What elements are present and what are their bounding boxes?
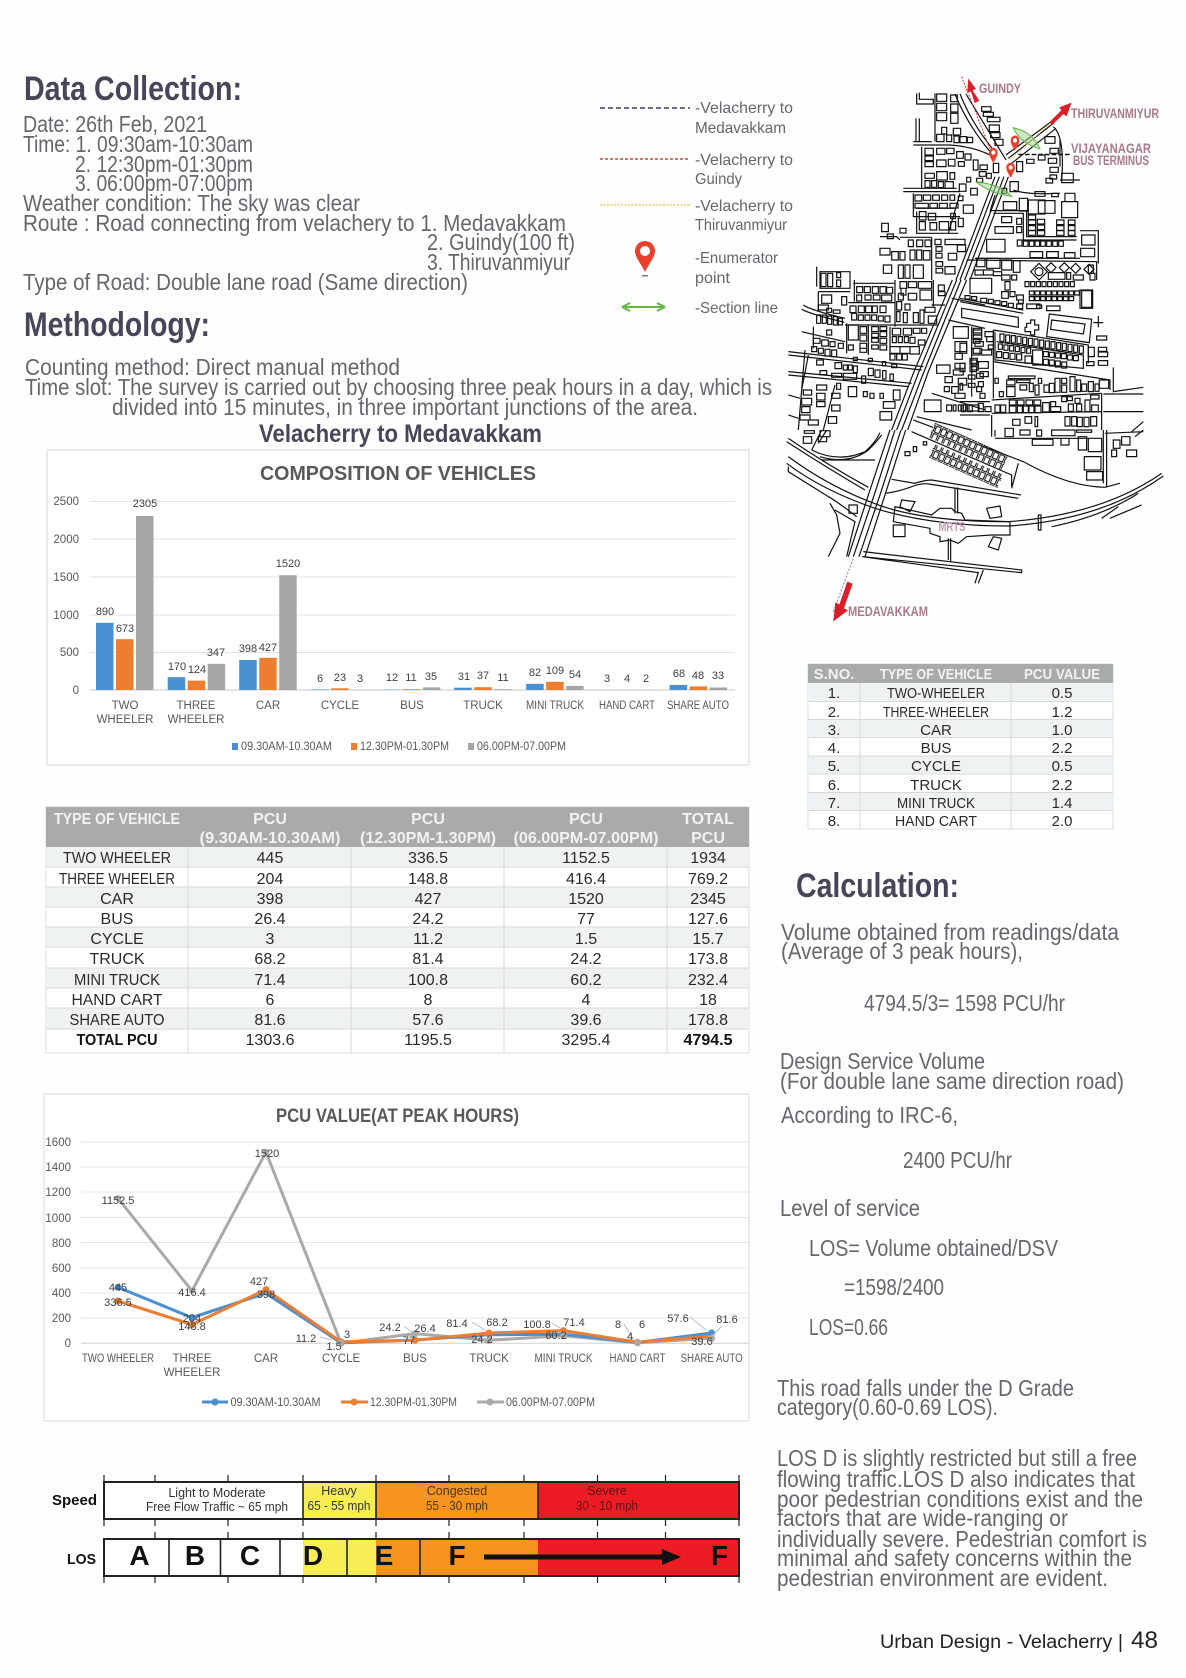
bar chart: composition of vehicles: MINI TRUCK (526, 700, 584, 712)
text block: data collection details: Time: 1. 09:30am-10:30am (23, 131, 253, 157)
map of velacherry: GUINDY (979, 80, 1022, 96)
line chart: pcu value at peak hours: CYCLE (322, 1353, 360, 1365)
line chart: pcu value at peak hours: 24.2 (379, 1322, 401, 1334)
table: pcu by time slot: 1195.5 (404, 1032, 452, 1049)
table: pcu by time slot: 1152.5 (562, 850, 610, 867)
text block: los d description: flowing traffic.LOS D also indicates that (777, 1466, 1136, 1492)
legend: velacherry to guindy: Guindy (695, 171, 742, 188)
table: pcu values per vehicle type: 6. (828, 777, 840, 794)
bar chart: composition of vehicles: 82 (529, 667, 541, 679)
line chart: pcu value at peak hours: THREE (173, 1353, 212, 1365)
bar chart: composition of vehicles: SHARE AUTO (667, 700, 729, 712)
chart legend: 06.00PM-07.00PM (506, 1397, 595, 1409)
table: pcu values per vehicle type: HAND CART (895, 813, 977, 830)
map of velacherry: MEDAVAKKAM (848, 603, 928, 619)
text block: methodology details: divided into 15 minutes, in three important junctions of the area. (112, 394, 698, 420)
bar chart: composition of vehicles: 35 (425, 671, 437, 683)
bar chart: composition of vehicles: 1500 (53, 572, 79, 584)
table: pcu by time slot: PCU (411, 811, 445, 828)
table: pcu by time slot: (12.30PM-1.30PM) (360, 830, 496, 847)
map of velacherry: BUS TERMINUS (1073, 152, 1149, 168)
speed row: Congested (427, 1484, 487, 1498)
table: pcu by time slot: 3 (266, 931, 275, 948)
bar chart: composition of vehicles: 0 (73, 685, 79, 697)
text block: los d description: pedestrian environment are evident. (777, 1565, 1108, 1591)
text block: data collection details: Date: 26th Feb, 2021 (23, 111, 207, 137)
table: pcu values per vehicle type: 1.0 (1052, 722, 1072, 739)
text block: data collection details (23, 111, 575, 295)
table: pcu values per vehicle type: 2.0 (1052, 813, 1072, 830)
bar chart: composition of vehicles: 4 (624, 673, 630, 685)
line chart: pcu value at peak hours: SHARE AUTO (681, 1353, 743, 1365)
table: pcu values per vehicle type: TYPE OF VEHICLE (880, 666, 992, 683)
table: pcu values per vehicle type: THREE-WHEELER (883, 704, 989, 721)
chart legend (232, 741, 566, 753)
text block: calculation steps: LOS=0.66 (809, 1314, 888, 1340)
table: pcu by time slot: 81.4 (412, 951, 444, 968)
chart legend: 09.30AM-10.30AM (241, 741, 332, 753)
text block: data collection details: 2. 12:30pm-01:30pm (75, 151, 253, 177)
table: pcu values per vehicle type: PCU VALUE (1024, 666, 1100, 683)
table: pcu values per vehicle type: 5. (828, 758, 840, 775)
text block: data collection details: Weather condition: The sky was clear (23, 190, 360, 216)
los row: D (303, 1540, 323, 1571)
text block: calculation steps: Level of service (780, 1195, 920, 1221)
text block: los d description: factors that are wide-ranging or (777, 1505, 1068, 1531)
table: pcu by time slot: 60.2 (570, 972, 602, 989)
line chart: pcu value at peak hours: 148.8 (178, 1321, 206, 1333)
icon: enumerator pin (635, 241, 779, 287)
table: pcu by time slot: 178.8 (688, 1012, 728, 1029)
table: pcu values per vehicle type: 1.4 (1052, 795, 1072, 812)
icon: enumerator pin: -Enumerator (695, 250, 779, 267)
bar chart: composition of vehicles: THREE (177, 700, 216, 712)
text block: calculation steps: According to IRC-6, (781, 1102, 958, 1128)
table: pcu by time slot: (06.00PM-07.00PM) (514, 830, 658, 847)
table: pcu by time slot: 24.2 (570, 951, 602, 968)
text block: calculation steps: =1598/2400 (844, 1274, 944, 1300)
bar chart: composition of vehicles: 11 (497, 672, 509, 684)
text block: los d description: minimal and safety concerns within the (777, 1545, 1132, 1571)
los row: F (711, 1540, 728, 1571)
line chart: pcu value at peak hours: 11.2 (296, 1333, 316, 1345)
table: pcu by time slot: MINI TRUCK (74, 972, 160, 989)
table: pcu by time slot: PCU (569, 811, 603, 828)
text block: data collection details: 2. Guindy(100 ft) (427, 229, 575, 255)
icon: section line arrow (622, 300, 778, 317)
table: pcu by time slot: 81.6 (254, 1012, 286, 1029)
table: pcu values per vehicle type: 2.2 (1052, 777, 1072, 794)
bar chart: composition of vehicles: 2305 (133, 498, 157, 510)
table: pcu by time slot: 445 (257, 850, 283, 867)
table: pcu by time slot: 1520 (568, 891, 604, 908)
table: pcu by time slot: 232.4 (688, 972, 728, 989)
bar chart: composition of vehicles: 33 (712, 670, 724, 682)
bar chart: composition of vehicles: 48 (692, 670, 704, 682)
chart legend: 06.00PM-07.00PM (477, 741, 566, 753)
text block: los d description: individually severe. Pedestrian comfort is (777, 1526, 1147, 1552)
map section: east (960, 231, 1143, 430)
table: pcu by time slot: PCU (691, 830, 725, 847)
speed row: Severe (587, 1484, 627, 1498)
text block: calculation steps: (Average of 3 peak hours), (781, 938, 1023, 964)
bar chart: composition of vehicles: 37 (477, 670, 489, 682)
speed row: 65 - 55 mph (308, 1499, 371, 1513)
line chart: pcu value at peak hours: 1200 (45, 1187, 71, 1199)
table: pcu by time slot: 11.2 (413, 931, 443, 948)
table: pcu by time slot: 100.8 (408, 972, 448, 989)
table: pcu by time slot: 1303.6 (246, 1032, 295, 1049)
line chart: pcu value at peak hours: 398 (257, 1289, 275, 1301)
los row: C (240, 1540, 260, 1571)
bar chart: composition of vehicles: HAND CART (599, 700, 655, 712)
line chart: pcu value at peak hours: 400 (52, 1288, 71, 1300)
bar chart: composition of vehicles: 11 (405, 672, 417, 684)
table: pcu by time slot: 71.4 (254, 972, 286, 989)
legend: velacherry to medavakkam (600, 100, 793, 137)
line chart: pcu value at peak hours: TRUCK (469, 1353, 509, 1365)
chart legend: 12.30PM-01.30PM (360, 741, 449, 753)
map section: south with railway (787, 420, 1163, 583)
text block: data collection details: 3. 06:00pm-07:00pm (75, 170, 253, 196)
bar chart: composition of vehicles: 2000 (53, 534, 79, 546)
text block: grade conclusion (777, 1375, 1074, 1420)
table: pcu values per vehicle type: 0.5 (1052, 758, 1072, 775)
text block: calculation steps: LOS= Volume obtained/DSV (809, 1235, 1059, 1261)
heading: calculation: Calculation: (796, 867, 959, 905)
table: pcu values per vehicle type: 7. (828, 795, 840, 812)
line chart: pcu value at peak hours: 1520 (255, 1148, 279, 1160)
table: pcu values per vehicle type: BUS (921, 740, 951, 757)
table: pcu by time slot: CYCLE (90, 931, 144, 948)
text block: data collection details: Type of Road: Double lane road (Same direction) (23, 269, 468, 295)
table: pcu by time slot: TOTAL PCU (76, 1032, 158, 1049)
los row: A (129, 1540, 150, 1571)
table: pcu values per vehicle type: TRUCK (910, 777, 962, 794)
text block: calculation steps: Volume obtained from readings/data (781, 919, 1119, 945)
line chart: pcu value at peak hours: 24.2 (471, 1334, 493, 1346)
table: pcu values per vehicle type: 0.5 (1052, 685, 1072, 702)
los row: LOS (67, 1551, 96, 1568)
bar chart: composition of vehicles: 3 (357, 673, 363, 685)
table: pcu by time slot: SHARE AUTO (70, 1012, 164, 1029)
text block: calculation steps: (For double lane same direction road) (780, 1068, 1124, 1094)
icon: section line arrow: -Section line (695, 300, 778, 317)
text block: grade conclusion: category(0.60-0.69 LOS). (777, 1394, 998, 1420)
line chart: pcu value at peak hours: 3 (344, 1329, 350, 1341)
line chart: pcu value at peak hours: 1000 (45, 1213, 71, 1225)
bar chart: composition of vehicles: CAR (256, 700, 280, 712)
table: pcu by time slot: 1934 (690, 850, 726, 867)
table: pcu by time slot: 4794.5 (684, 1032, 733, 1049)
line chart: pcu value at peak hours: 0 (65, 1338, 71, 1350)
line chart: pcu value at peak hours: 26.4 (414, 1323, 436, 1335)
bar chart: composition of vehicles: 3 (604, 673, 610, 685)
bar chart: composition of vehicles: 673 (116, 623, 134, 635)
chart legend: 12.30PM-01.30PM (370, 1397, 457, 1409)
bar chart: composition of vehicles: 68 (673, 668, 685, 680)
table: pcu by time slot: TRUCK (89, 951, 145, 968)
legend: velacherry to medavakkam: -Velacherry to (695, 100, 793, 117)
table: pcu values per vehicle type: 2.2 (1052, 740, 1072, 757)
table: pcu by time slot: 3295.4 (562, 1032, 611, 1049)
line chart: pcu value at peak hours: 77 (403, 1335, 415, 1347)
bar chart: composition of vehicles: 1000 (53, 610, 79, 622)
bar chart: composition of vehicles: 12 (386, 672, 398, 684)
legend: velacherry to medavakkam: Medavakkam (695, 120, 786, 137)
table: pcu by time slot: PCU (253, 811, 287, 828)
line chart: pcu value at peak hours: 100.8 (523, 1319, 551, 1331)
text block: methodology details (25, 354, 772, 420)
table: pcu by time slot: TYPE OF VEHICLE (54, 811, 180, 828)
table: pcu values per vehicle type: MINI TRUCK (897, 795, 975, 812)
bar chart: composition of vehicles: WHEELER (168, 714, 224, 726)
heading: velacherry to medavakkam: Velacherry to Medavakkam (259, 420, 542, 448)
line chart: pcu value at peak hours: 71.4 (563, 1317, 585, 1329)
line chart: pcu value at peak hours: MINI TRUCK (534, 1353, 593, 1365)
line chart: pcu value at peak hours: 4 (627, 1331, 633, 1343)
map section: west (788, 267, 985, 430)
line chart: pcu value at peak hours: 39.6 (691, 1336, 713, 1348)
footer: page label: Urban Design - Velacherry | (880, 1632, 1123, 1653)
chart title: PCU VALUE(AT PEAK HOURS) (276, 1106, 519, 1127)
bar chart: composition of vehicles: TRUCK (463, 700, 503, 712)
footer: page label (880, 1627, 1158, 1654)
bar chart: composition of vehicles: 427 (259, 642, 277, 654)
speed row: 30 - 10 mph (576, 1499, 638, 1513)
table: pcu by time slot: 39.6 (570, 1012, 602, 1029)
line chart: pcu value at peak hours: 1400 (45, 1162, 71, 1174)
text block: data collection details: Route : Road connecting from velachery to 1. Medavakkam (23, 210, 566, 236)
legend: velacherry to guindy (600, 152, 793, 188)
table: pcu values per vehicle type: TWO-WHEELER (887, 685, 985, 702)
text block: los d description: LOS D is slightly restricted but still a free (777, 1445, 1137, 1471)
line chart: pcu value at peak hours: 416.4 (178, 1287, 206, 1299)
line chart: pcu value at peak hours: 445 (109, 1282, 127, 1294)
table: pcu by time slot: 8 (424, 992, 433, 1009)
text block: calculation steps: 2400 PCU/hr (903, 1147, 1012, 1173)
footer: page label: 48 (1131, 1627, 1158, 1654)
line chart: pcu value at peak hours: 200 (52, 1313, 71, 1325)
table: pcu by time slot: (9.30AM-10.30AM) (200, 830, 340, 847)
los row: B (185, 1540, 205, 1571)
bar chart: composition of vehicles: 124 (188, 664, 206, 676)
los row: F (448, 1540, 466, 1571)
line chart: pcu value at peak hours: WHEELER (164, 1367, 220, 1379)
heading: methodology: Methodology: (24, 306, 210, 344)
line chart: pcu value at peak hours: 81.4 (446, 1318, 468, 1330)
bar chart: composition of vehicles: 398 (239, 643, 257, 655)
chart legend: 09.30AM-10.30AM (230, 1397, 320, 1409)
line chart: pcu value at peak hours: HAND CART (610, 1353, 666, 1365)
text block: calculation steps: 4794.5/3= 1598 PCU/hr (864, 990, 1065, 1016)
table: pcu values per vehicle type: CAR (920, 722, 952, 739)
table: pcu values per vehicle type: 1. (828, 685, 840, 702)
map of velacherry: MRTS (938, 519, 966, 534)
table: pcu by time slot: 427 (415, 891, 441, 908)
bar chart: composition of vehicles: CYCLE (321, 700, 359, 712)
table: pcu values per vehicle type: 4. (828, 740, 840, 757)
speed row: Speed (52, 1492, 97, 1509)
legend: velacherry to thiruvanmiyur (600, 198, 793, 234)
speed row: Heavy (321, 1484, 357, 1498)
table: pcu by time slot: 26.4 (254, 911, 286, 928)
line chart: pcu value at peak hours: 8 (615, 1319, 621, 1331)
table: pcu by time slot: THREE WHEELER (59, 871, 175, 888)
line chart: pcu value at peak hours: 60.2 (545, 1330, 567, 1342)
table: pcu by time slot: 416.4 (566, 871, 606, 888)
table: pcu by time slot: 68.2 (254, 951, 286, 968)
table: pcu by time slot: BUS (101, 911, 133, 928)
line chart: pcu value at peak hours: BUS (403, 1353, 427, 1365)
routes, markers and arrows (833, 77, 1072, 622)
bar chart: composition of vehicles: 31 (458, 671, 470, 683)
table: pcu by time slot: 336.5 (408, 850, 448, 867)
table: pcu values per vehicle type: S.NO. (814, 666, 854, 683)
table: pcu by time slot: TWO WHEELER (63, 850, 171, 867)
table: pcu by time slot: 769.2 (688, 871, 728, 888)
table: pcu by time slot: 6 (266, 992, 275, 1009)
bar chart: composition of vehicles: 109 (546, 665, 564, 677)
map legend (600, 100, 793, 317)
table: pcu by time slot: 4 (582, 992, 591, 1009)
chart legend (202, 1397, 595, 1409)
line chart: pcu value at peak hours: TWO WHEELER (82, 1353, 154, 1365)
table: pcu values per vehicle type: CYCLE (911, 758, 961, 775)
legend: velacherry to thiruvanmiyur: Thiruvanmiyur (695, 217, 788, 234)
speed row (52, 1482, 739, 1519)
line chart: pcu value at peak hours: CAR (254, 1353, 278, 1365)
speed row: Free Flow Traffic ~ 65 mph (146, 1500, 288, 1514)
text block: data collection details: 3. Thiruvanmiyur (427, 249, 570, 275)
bar chart: composition of vehicles: 23 (334, 672, 346, 684)
text block: los d description: poor pedestrian conditions exist and the (777, 1486, 1143, 1512)
table: pcu by time slot: 398 (257, 891, 283, 908)
bar chart: composition of vehicles: 6 (317, 673, 323, 685)
table: pcu by time slot: 148.8 (408, 871, 448, 888)
bar chart: composition of vehicles: WHEELER (97, 714, 153, 726)
line chart: pcu value at peak hours: 1.5 (326, 1341, 342, 1353)
line chart: pcu value at peak hours: 1600 (45, 1137, 71, 1149)
bar chart: composition of vehicles: 500 (60, 647, 79, 659)
table: pcu by time slot: 173.8 (688, 951, 728, 968)
speed row: 55 - 30 mph (426, 1499, 488, 1513)
line chart: pcu value at peak hours: 1152.5 (102, 1195, 134, 1207)
bar chart: composition of vehicles: BUS (400, 700, 424, 712)
table: pcu values per vehicle type: 2. (828, 704, 840, 721)
line chart: pcu value at peak hours: 81.6 (716, 1314, 738, 1326)
text block: calculation steps: Design Service Volume (780, 1048, 985, 1074)
table: pcu by time slot: TOTAL (682, 811, 734, 828)
line chart: pcu value at peak hours: 57.6 (667, 1313, 689, 1325)
bar chart: composition of vehicles: 2 (643, 673, 649, 685)
line chart: pcu value at peak hours: 600 (52, 1263, 71, 1275)
text block: methodology details: Time slot: The survey is carried out by choosing three peak hours in a day, which is (25, 374, 772, 400)
line chart: pcu value at peak hours (44, 1094, 749, 1421)
table: pcu values per vehicle type: 8. (828, 813, 840, 830)
line chart: pcu value at peak hours: 336.5 (104, 1297, 132, 1309)
table: pcu by time slot: 57.6 (412, 1012, 444, 1029)
table: pcu values per vehicle type: 3. (828, 722, 840, 739)
line chart: pcu value at peak hours: 68.2 (486, 1317, 508, 1329)
text block: grade conclusion: This road falls under the D Grade (777, 1375, 1074, 1401)
icon: enumerator pin: point (695, 270, 731, 287)
table: pcu by time slot: 127.6 (688, 911, 728, 928)
los speed scale (52, 1475, 739, 1583)
table: pcu by time slot: CAR (100, 891, 134, 908)
table: pcu by time slot: 77 (577, 911, 595, 928)
bar chart: composition of vehicles: 2500 (53, 496, 79, 508)
map of velacherry: THIRUVANMIYUR (1071, 105, 1159, 121)
arrow (484, 1549, 681, 1565)
table: pcu by time slot: 15.7 (692, 931, 724, 948)
table: pcu by time slot: 1.5 (575, 931, 597, 948)
table: pcu by time slot: 24.2 (412, 911, 444, 928)
text block: los d description (777, 1445, 1147, 1591)
legend: velacherry to guindy: -Velacherry to (695, 152, 793, 169)
line chart: pcu value at peak hours: 427 (250, 1276, 268, 1288)
bar chart: composition of vehicles: 54 (569, 669, 581, 681)
bar chart: composition of vehicles: 1520 (276, 558, 300, 570)
table: pcu by time slot: 2345 (690, 891, 726, 908)
map of velacherry (787, 77, 1163, 622)
map section: north (880, 93, 1080, 280)
bar chart: composition of vehicles: 890 (96, 606, 114, 618)
table: pcu by time slot: HAND CART (72, 992, 163, 1009)
chart title: COMPOSITION OF VEHICLES (260, 463, 536, 485)
heading: data collection: Data Collection: (24, 70, 242, 108)
line chart: pcu value at peak hours: 6 (639, 1319, 645, 1331)
text block: methodology details: Counting method: Direct manual method (25, 354, 400, 380)
table: pcu by time slot (46, 807, 749, 1053)
bar chart: composition of vehicles: 170 (168, 661, 186, 673)
text block: calculation steps (780, 919, 1124, 1340)
bar chart: composition of vehicles: 347 (207, 647, 225, 659)
table: pcu by time slot: 18 (699, 992, 717, 1009)
los row: E (375, 1540, 393, 1571)
line chart: pcu value at peak hours: 204 (183, 1313, 201, 1325)
table: pcu by time slot: 204 (257, 871, 283, 888)
legend: velacherry to thiruvanmiyur: -Velacherry to (695, 198, 793, 215)
bar chart: composition of vehicles: TWO (112, 700, 138, 712)
table: pcu values per vehicle type: 1.2 (1052, 704, 1072, 721)
speed row: Light to Moderate (168, 1486, 266, 1500)
bar chart: composition of vehicles (47, 450, 749, 765)
line chart: pcu value at peak hours: 800 (52, 1238, 71, 1250)
map of velacherry: VIJAYANAGAR (1071, 140, 1151, 156)
los row (67, 1539, 739, 1576)
table: pcu values per vehicle type (808, 664, 1113, 830)
